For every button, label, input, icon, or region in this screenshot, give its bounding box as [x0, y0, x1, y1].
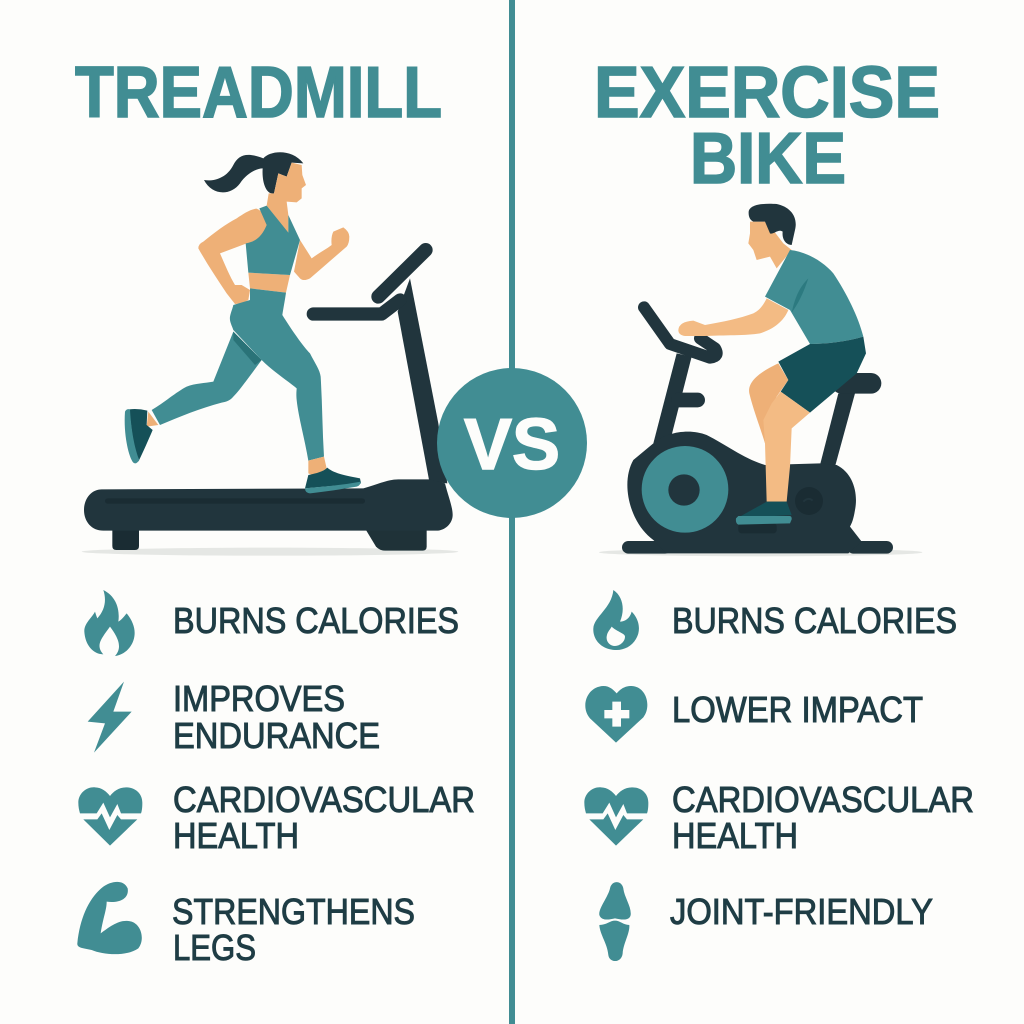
icon: heart with plus: [585, 686, 647, 743]
benefit: improves endurance: [173, 678, 380, 756]
runner figure: [125, 152, 361, 493]
illustration: man on exercise bike: [599, 204, 922, 556]
benefit: joint-friendly: JOINT-FRIENDLY: [670, 891, 933, 932]
benefit: cardiovascular health: HEALTH: [173, 815, 299, 856]
illustration: woman running on treadmill: [82, 152, 458, 556]
exercise bike heading: EXERCISE: [594, 53, 940, 133]
rider figure: [678, 204, 866, 525]
benefit: improves endurance: ENDURANCE: [173, 715, 380, 756]
icon: flame: [84, 590, 135, 656]
benefit: cardiovascular health: HEALTH: [672, 815, 798, 856]
benefit: cardiovascular health: CARDIOVASCULAR: [672, 779, 974, 820]
benefit: burns calories: BURNS CALORIES: [173, 600, 459, 641]
icon: flexed arm: [77, 882, 142, 954]
treadmill machine: [84, 250, 453, 551]
benefit: cardiovascular health: CARDIOVASCULAR: [173, 779, 475, 820]
exercise bike heading: [594, 53, 940, 199]
benefit: cardiovascular health: [173, 779, 475, 856]
icon: heart with pulse: [584, 787, 648, 846]
benefit: strengthens legs: STRENGTHENS: [172, 891, 415, 932]
icon: knee joint: [599, 882, 631, 961]
benefit: strengthens legs: LEGS: [173, 927, 256, 968]
icon: lightning bolt: [88, 682, 132, 753]
treadmill heading: TREADMILL: [75, 53, 442, 133]
benefit: improves endurance: IMPROVES: [173, 678, 345, 719]
benefit: cardiovascular health: [672, 779, 974, 856]
benefit: lower impact: LOWER IMPACT: [672, 689, 923, 730]
bike machine: [627, 307, 887, 553]
icon: flame with inner drop: [593, 590, 639, 650]
exercise bike heading: BIKE: [690, 119, 846, 199]
icon: heart with pulse: [78, 787, 142, 846]
benefit: strengthens legs: [172, 891, 415, 968]
benefit: burns calories: BURNS CALORIES: [672, 600, 957, 641]
vs badge: VS: [464, 405, 560, 485]
vs badge: [437, 368, 587, 518]
